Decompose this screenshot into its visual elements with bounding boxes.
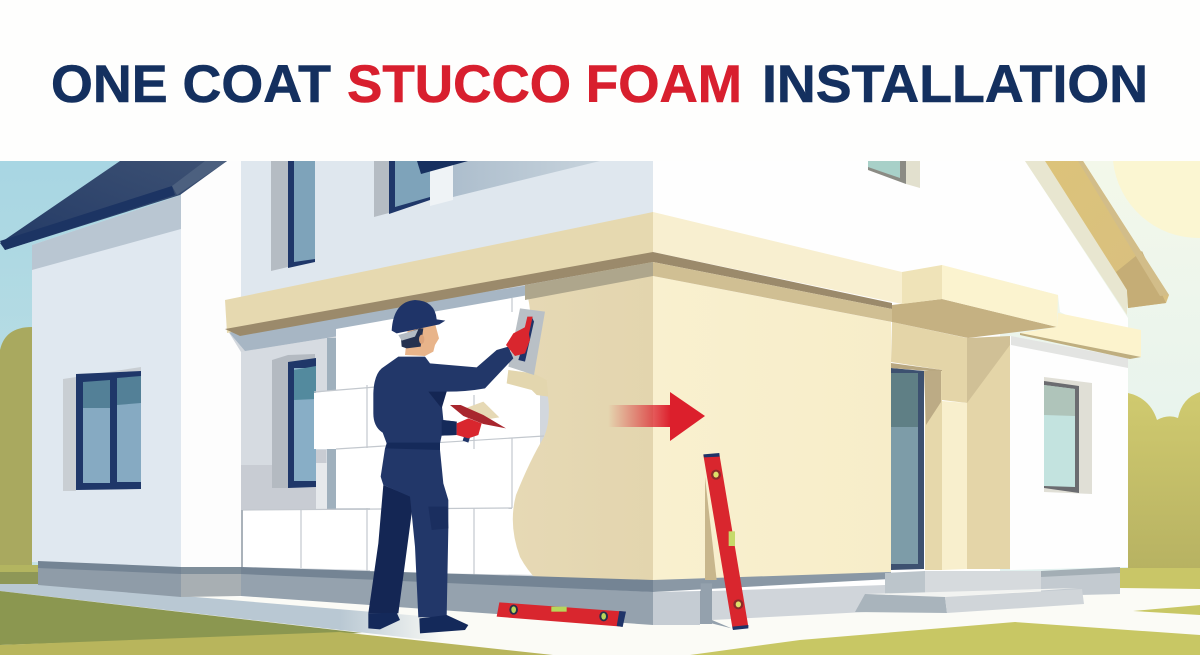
plinth base [38, 561, 1120, 625]
lawn light left [0, 632, 553, 655]
upper window 1 [271, 161, 315, 271]
worker [368, 300, 626, 633]
body [373, 347, 513, 617]
title: ONE COAT [51, 55, 331, 114]
roof [0, 161, 227, 250]
entry porch [891, 322, 1010, 570]
pocket [428, 507, 448, 530]
left bush [0, 327, 32, 570]
foam board panels [243, 293, 544, 576]
small upper window [868, 161, 920, 188]
gable roof [1025, 161, 1169, 315]
right glove [506, 326, 530, 356]
body shading [428, 392, 447, 408]
cornice band [225, 212, 902, 336]
walkway left [0, 584, 445, 642]
boots [368, 613, 468, 633]
belt [386, 443, 440, 450]
upper window 2 [374, 161, 430, 217]
lower window [272, 354, 327, 510]
right bush [1128, 392, 1200, 570]
porch steps [855, 571, 1084, 613]
applied stucco plaster [513, 252, 653, 583]
sleeve cuff [442, 420, 457, 436]
porch canopy [892, 265, 1141, 359]
lawn dark [0, 591, 362, 645]
right white wing [1010, 336, 1128, 570]
title: INSTALLATION [762, 55, 1148, 114]
upright spirit level [701, 453, 748, 630]
trowel on wall [507, 308, 548, 397]
door [891, 368, 924, 570]
awning [417, 161, 468, 174]
sky and background [0, 161, 1200, 571]
rear shadow leg [368, 485, 412, 613]
lawn right [690, 622, 1200, 655]
title [0, 0, 1200, 161]
hawk tool [450, 402, 506, 443]
left wing of house [0, 161, 241, 568]
right upper gable wall [653, 161, 1169, 345]
right window [1044, 377, 1092, 494]
red arrow [608, 392, 705, 441]
lawn far right [1133, 605, 1200, 615]
head [392, 300, 445, 356]
centre lower wall [228, 250, 653, 600]
lying spirit level [497, 602, 626, 627]
front stucco wall [653, 276, 891, 582]
title: STUCCO FOAM [347, 55, 742, 114]
centre upper wall [241, 161, 653, 301]
ground [0, 565, 1200, 655]
sun [1113, 161, 1200, 238]
window left wing [63, 367, 141, 491]
